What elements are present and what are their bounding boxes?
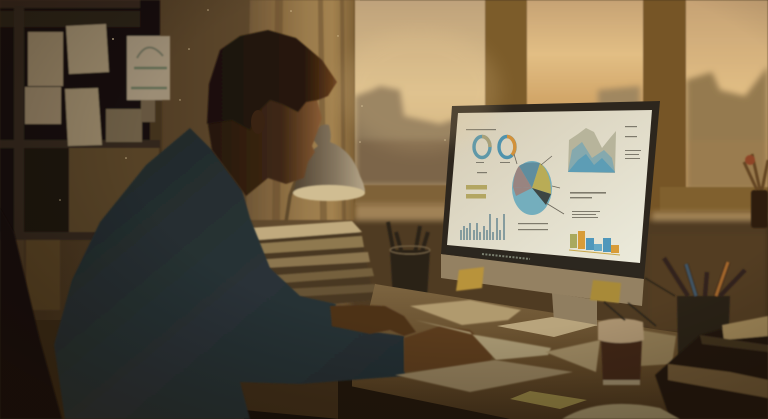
taskbar xyxy=(445,246,640,277)
torso and arm xyxy=(54,128,405,419)
warm window light glow xyxy=(340,30,500,150)
stack of books xyxy=(655,316,768,419)
background wall xyxy=(0,0,360,320)
screen xyxy=(447,110,652,263)
curtain xyxy=(246,0,354,220)
city buildings left pane xyxy=(355,66,768,190)
monitor xyxy=(441,101,660,337)
papers on desk xyxy=(395,330,676,392)
shelf and pinboard xyxy=(0,0,170,310)
hair xyxy=(207,30,337,130)
desk surface xyxy=(235,284,768,419)
ear xyxy=(251,110,265,134)
dashboard: donut charts xyxy=(474,136,515,158)
sticky note on desk xyxy=(510,391,587,409)
dashboard: pie chart xyxy=(512,161,552,215)
monitor stand xyxy=(552,293,597,326)
upper hand xyxy=(330,305,416,336)
stack of papers xyxy=(249,221,376,306)
bezel xyxy=(441,101,660,279)
lower hand xyxy=(404,326,494,372)
chair xyxy=(0,208,62,419)
man xyxy=(54,30,494,419)
coffee cup xyxy=(598,318,644,385)
window sill and lower wall xyxy=(350,204,768,334)
dashboard: bar chart xyxy=(569,231,620,255)
dashboard: progress bars xyxy=(466,185,487,198)
dashboard: text placeholders xyxy=(466,126,641,230)
left pen cup xyxy=(388,222,430,303)
neck and face xyxy=(208,96,322,196)
dashboard: column chart xyxy=(461,214,504,240)
plant on window sill xyxy=(744,154,768,228)
window with city view xyxy=(350,0,768,225)
pinned notes xyxy=(25,24,170,146)
right pen holder xyxy=(604,258,745,358)
notebook on desk xyxy=(410,300,521,325)
dust motes xyxy=(59,9,446,201)
dashboard: pie callout lines xyxy=(514,154,564,214)
sticky notes on monitor xyxy=(456,267,621,303)
chin xyxy=(441,254,644,306)
foreground object at bottom edge xyxy=(562,404,680,419)
stand base xyxy=(497,317,598,337)
desk lamp xyxy=(286,125,365,222)
dashboard: area chart xyxy=(568,128,616,173)
keyboard xyxy=(415,320,551,360)
